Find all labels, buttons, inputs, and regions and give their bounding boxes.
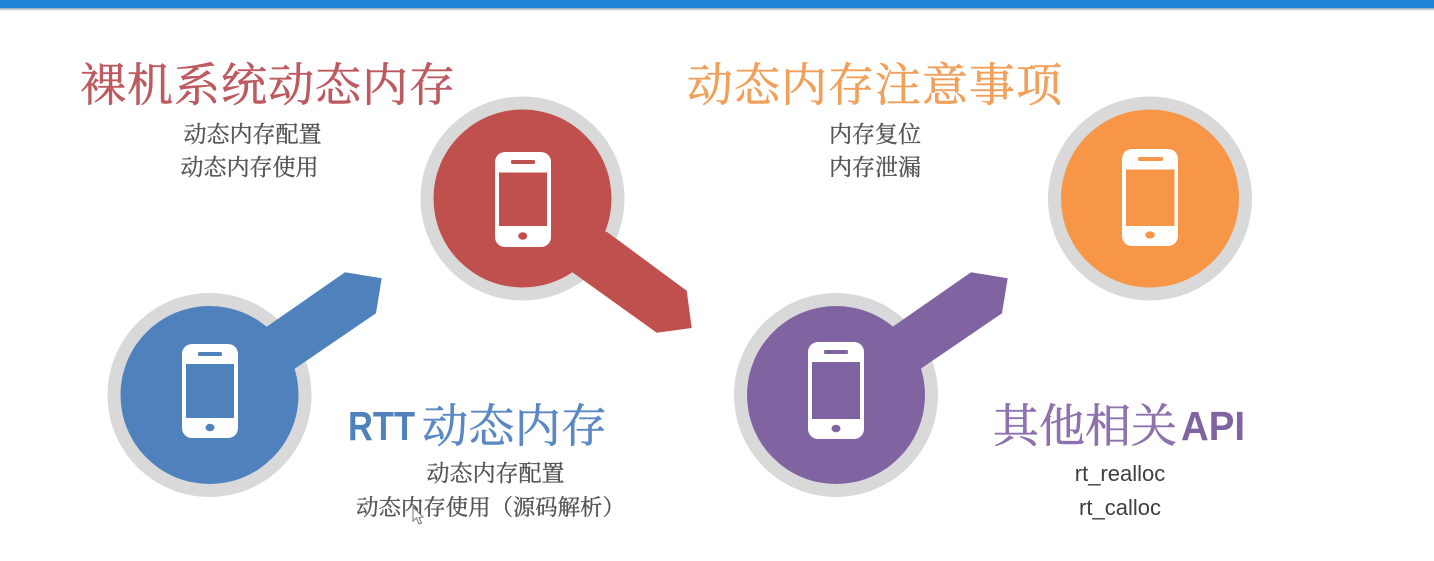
text: notes list: 内存复位 (829, 122, 921, 147)
text: RTT list (356, 461, 625, 520)
text: API list: rt_realloc (1075, 461, 1165, 486)
icon: purple magnifier (734, 272, 1008, 497)
text: bare metal list (180, 122, 322, 180)
title: dynamic memory notes: 动态内存注意事项 (687, 60, 1063, 111)
icon: red phone (495, 152, 551, 247)
icon: red magnifier (420, 96, 692, 333)
text: RTT list: 动态内存使用（源码解析） (356, 495, 625, 520)
icon: mouse cursor (413, 507, 423, 524)
title: other related API: API (1181, 403, 1245, 449)
icon: orange phone (1122, 149, 1178, 246)
text: API list: rt_calloc (1079, 495, 1161, 520)
title: RTT dynamic memory: RTT (348, 403, 415, 449)
text: RTT list: 动态内存配置 (426, 461, 564, 486)
icon: blue phone (182, 344, 238, 438)
icon: purple phone (808, 342, 864, 439)
text: bare metal list: 动态内存使用 (180, 155, 318, 180)
text: bare metal list: 动态内存配置 (184, 122, 322, 147)
title: other related API: 其他相关 (993, 401, 1177, 452)
top bar (0, 0, 1434, 11)
text: notes list: 内存泄漏 (829, 155, 921, 180)
icon: blue magnifier (108, 272, 382, 497)
text: API list (1075, 461, 1165, 520)
title: RTT dynamic memory: 动态内存 (422, 401, 607, 452)
icon: orange circle (1048, 96, 1252, 300)
text: notes list (829, 122, 921, 180)
title: bare metal dynamic memory: 裸机系统动态内存 (80, 60, 455, 111)
